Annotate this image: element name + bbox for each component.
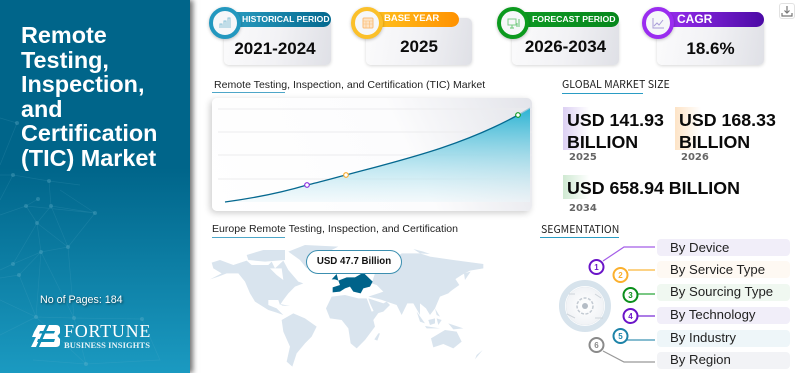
- text: By Region: [670, 352, 731, 367]
- year: 2026: [681, 152, 709, 163]
- header pill: [517, 12, 619, 27]
- segment: By Device: [657, 239, 790, 256]
- amount: USD 168.33: [679, 110, 776, 130]
- title: and: [21, 96, 63, 122]
- heading: market chart: Remote Testing, Inspection, and Certification (TIC) Market: [214, 79, 485, 91]
- amount: BILLION: [567, 132, 638, 152]
- year: 2034: [569, 203, 597, 214]
- numbered nodes: [590, 260, 638, 352]
- heading: segmentation: SEGMENTATION: [541, 222, 619, 237]
- chart: growth curve: [218, 108, 530, 203]
- header pill: BASE YEAR: [384, 13, 439, 24]
- callout: Europe value: [306, 250, 402, 274]
- text: By Industry: [670, 330, 736, 345]
- title: Certification: [21, 120, 157, 146]
- header pill: [662, 12, 764, 27]
- icon: forecast chart: [497, 7, 529, 39]
- icon: logo mark: [31, 325, 60, 347]
- logo: Fortune Business Insights: [31, 321, 151, 350]
- text: By Technology: [670, 307, 756, 322]
- amount: [679, 110, 776, 152]
- panel: sidebar: [0, 0, 190, 373]
- header pill: [371, 12, 459, 27]
- header pill: [229, 12, 331, 27]
- title: [21, 22, 157, 171]
- amount: [567, 110, 664, 152]
- logo wordmark: FORTUNE: [64, 321, 151, 341]
- numbered nodes: 4: [628, 312, 633, 321]
- logo subtitle: BUSINESS INSIGHTS: [64, 340, 150, 350]
- heading: global market size: GLOBAL MARKET SIZE: [562, 77, 670, 92]
- title: Remote: [21, 22, 107, 48]
- segmentation diagram: [559, 246, 655, 363]
- accent: [675, 107, 701, 150]
- panel: CAGR: [640, 6, 766, 68]
- header pill: HISTORICAL PERIOD: [242, 14, 330, 24]
- segment: By Sourcing Type: [657, 284, 790, 301]
- stat: 2034 market size: [563, 175, 740, 214]
- amount: BILLION: [679, 132, 750, 152]
- icon: growth chart: [642, 7, 674, 39]
- icon: download button: [779, 3, 795, 19]
- world map: [211, 245, 484, 366]
- text: By Sourcing Type: [670, 284, 773, 299]
- text: By Service Type: [670, 262, 765, 277]
- title: Testing,: [21, 46, 109, 72]
- numbered nodes: 3: [628, 291, 633, 300]
- stat: 2026 market size: [675, 107, 776, 163]
- title: Inspection,: [21, 71, 144, 97]
- header pill: CAGR: [677, 12, 712, 26]
- numbered nodes: 1: [594, 263, 599, 272]
- value: 2026-2034: [525, 37, 606, 56]
- header pill: FORECAST PERIOD: [532, 14, 616, 24]
- icon: hub: [562, 283, 608, 329]
- segment: By Industry: [657, 330, 790, 347]
- card: [657, 18, 764, 65]
- panel: area chart: [212, 98, 532, 211]
- card: [224, 18, 331, 65]
- network pattern: [0, 118, 160, 366]
- accent: [563, 107, 589, 150]
- panel: historical period: [208, 6, 332, 68]
- numbered nodes: 5: [618, 332, 623, 341]
- panel: base year: [350, 6, 474, 68]
- amount: USD 141.93: [567, 110, 664, 130]
- value: 2021-2024: [234, 39, 316, 58]
- accent: [563, 175, 589, 199]
- card: [512, 18, 619, 65]
- value: 2025: [400, 37, 438, 56]
- segment: By Service Type: [657, 261, 790, 278]
- connectors: [603, 247, 655, 362]
- title: (TIC) Market: [21, 144, 156, 170]
- year: 2025: [569, 152, 597, 163]
- value: 18.6%: [686, 39, 735, 58]
- heading: Europe map: Europe Remote Testing, Inspection, and Certification: [212, 223, 458, 235]
- page count: No of Pages: 184: [40, 294, 123, 306]
- numbered nodes: 2: [618, 271, 623, 280]
- Europe highlight: [332, 273, 373, 293]
- icon: bar chart: [209, 7, 241, 39]
- segment: By Technology: [657, 307, 790, 324]
- segment: By Region: [657, 352, 790, 369]
- card: [366, 18, 472, 65]
- panel: forecast period: [496, 6, 620, 68]
- stat: 2025 market size: [563, 107, 664, 163]
- text: By Device: [670, 240, 729, 255]
- callout: Europe value: USD 47.7 Billion: [317, 256, 391, 267]
- icon: calendar: [351, 7, 383, 39]
- numbered nodes: 6: [594, 341, 599, 350]
- amount: USD 658.94 BILLION: [567, 178, 740, 198]
